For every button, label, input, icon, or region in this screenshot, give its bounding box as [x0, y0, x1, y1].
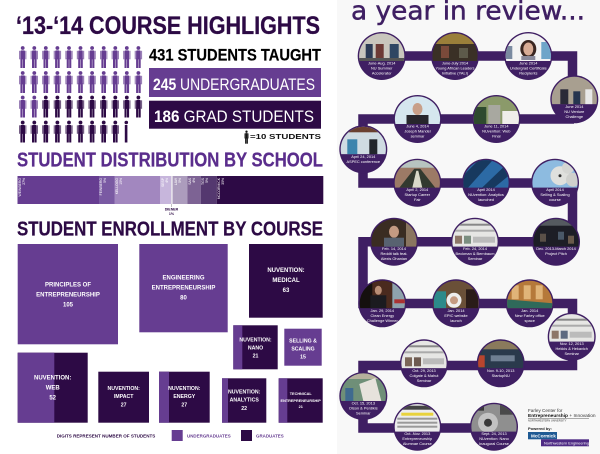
- event: clean energy winner: Clean Energy: [371, 313, 394, 318]
- event: venture challenge: NU Venture: [564, 109, 584, 114]
- block: impact: [98, 372, 149, 423]
- stat: grad students: [149, 101, 321, 129]
- event: venture challenge: June 2014: [565, 104, 584, 109]
- event: EPIC website launch: Jan. 2014: [447, 308, 465, 313]
- event: Beckman and Bernbaum seminar: Seminar: [468, 256, 483, 261]
- event: new Farley office: [506, 279, 554, 329]
- event: clean energy winner: Challenge Winner: [367, 318, 398, 323]
- callout: diener: DIENER: [165, 208, 179, 212]
- stacked bar chart: WEINBERG: [18, 178, 22, 196]
- event: ASPEC conference: [339, 125, 387, 175]
- stacked bar chart: 4%: [165, 178, 169, 183]
- event: YALI: [431, 32, 479, 82]
- event: NUvention web final: [472, 95, 520, 145]
- event: Reddit talk: Alexis Ohanian: [381, 256, 407, 261]
- event: new Farley office: space: [525, 318, 535, 323]
- block: web: NUVENTION:: [34, 376, 71, 382]
- event: entrepreneurship alumnae course: Oct.-Nov. 2013: [404, 431, 430, 436]
- block: energy: NUVENTION:: [168, 386, 201, 392]
- event: entrepreneurship alumnae course: Alumnae Course: [403, 441, 432, 446]
- block: selling and scaling: [284, 329, 322, 366]
- event: NUvention web final: June 11, 2014: [484, 124, 509, 128]
- event: EPIC website launch: EPIC website: [444, 313, 468, 318]
- event: StartupNU: [477, 339, 525, 389]
- callout: diener: 1%: [169, 212, 175, 216]
- block: engineering: ENGINEERING: [162, 276, 205, 282]
- pictogram key: [244, 131, 321, 144]
- event: Joseph Mandel seminar: [394, 95, 442, 145]
- block: impact: 27: [121, 402, 127, 408]
- event: project pitch: Dec. 2013-March 2014: [536, 246, 577, 251]
- stacked bar chart: LAW: [174, 177, 178, 185]
- panel: year in review: [337, 0, 600, 454]
- event: StartupNU: Nov. 9-10, 2013: [487, 368, 514, 373]
- logo: Northwestern Engineering: Northwestern Engineering: [544, 440, 589, 446]
- event: summer accelerator: NU Summer: [371, 66, 393, 70]
- logo: Farley Center: NORTHWESTERN UNIVERSITY: [528, 418, 567, 422]
- logo: Farley Center: [528, 408, 596, 422]
- callout: diener: [165, 204, 179, 216]
- block: impact: NUVENTION:: [108, 386, 140, 392]
- event: EPIC website launch: [432, 279, 480, 329]
- block: nano: [233, 325, 278, 369]
- panel: course highlights: [16, 12, 322, 144]
- block: medical: NUVENTION:: [267, 268, 305, 274]
- stacked bar chart: SAS: [188, 177, 192, 185]
- timeline path: [363, 56, 574, 428]
- event: Colgate and Mahut seminar: [400, 339, 448, 389]
- event: selling and scaling course: April 2014: [546, 187, 565, 192]
- event: YALI: Initiative (YALI): [442, 70, 469, 76]
- event: YALI: Young African Leaders: [435, 66, 475, 70]
- stacked bar chart: 35%: [221, 178, 225, 185]
- event: undergrad certificate: Undergrad Certificate: [510, 66, 547, 70]
- event: startup career fair: [393, 159, 441, 209]
- event: entrepreneurship alumnae course: Entrepreneurship: [402, 436, 432, 441]
- heading: STUDENT ENROLLMENT BY COURSE: [17, 219, 323, 241]
- pictogram: students: [19, 46, 142, 142]
- event: Hekkis and Hekavich seminar: Nov. 12, 2013: [560, 341, 584, 346]
- block: analytics: ANALYTICS: [230, 398, 259, 404]
- block: nano: NANO: [248, 346, 263, 352]
- event: undergrad certificate: June 2014: [519, 60, 538, 66]
- event: Reddit talk: [370, 218, 418, 268]
- event: NUvention web final: NUvention: Web: [482, 128, 510, 134]
- logo: McCormick: [528, 432, 557, 439]
- event: Joseph Mandel seminar: Joseph Mandel: [404, 128, 431, 134]
- event: Reddit talk: Reddit talk feat.: [380, 251, 408, 256]
- stacked bar chart: MCCORMICK: [217, 177, 221, 199]
- event: startup career fair: Fair: [414, 197, 421, 202]
- block: web: 52: [49, 396, 57, 402]
- powered by label: Powered by:: [528, 426, 552, 431]
- event: Joseph Mandel seminar: June 4, 2014: [406, 124, 430, 128]
- event: Beckman and Bernbaum seminar: Feb. 24, 2014: [463, 246, 488, 251]
- event: NUvention analytics launched: launched: [478, 197, 494, 202]
- block: energy: [159, 372, 210, 423]
- event: Beckman and Bernbaum seminar: [451, 218, 499, 268]
- stacked bar chart: 15%: [119, 178, 123, 185]
- block: technical: TECHNICAL: [290, 392, 312, 396]
- event: ASPEC conference: April 24, 2014: [351, 154, 376, 159]
- block: medical: [249, 244, 323, 318]
- event: undergrad certificate: [504, 32, 552, 82]
- block: technical: ENTREPRENEURSHIP: [281, 399, 321, 403]
- stacked bar chart: 27%: [22, 178, 26, 185]
- event: summer accelerator: [358, 32, 406, 82]
- event: Hekkis and Hekavich seminar: Seminar: [564, 351, 580, 356]
- block: principles: ENTREPRENEURSHIP: [36, 292, 100, 298]
- event: venture challenge: Challenge: [566, 114, 583, 119]
- event: clean energy winner: [358, 279, 406, 329]
- event: NUvention nano: [470, 403, 518, 453]
- block: analytics: NUVENTION:: [228, 390, 261, 396]
- event: project pitch: Project Pitch: [545, 251, 567, 256]
- event: new Farley office: Jan. 2014: [521, 308, 539, 313]
- logo: Farley Center: Farley Center for: [528, 408, 563, 413]
- event: Olson and Perdikis seminar: Olson & Perdikis: [349, 406, 378, 410]
- panel: student enrollment: [17, 219, 323, 441]
- stat: undergraduates: [149, 68, 321, 97]
- event: Joseph Mandel seminar: seminar: [411, 134, 425, 138]
- stat: total students: 431 STUDENTS TAUGHT: [149, 46, 322, 64]
- block: energy: ENERGY: [173, 394, 196, 400]
- heading: STUDENT DISTRIBUTION BY SCHOOL: [17, 150, 323, 172]
- logo: Farley Center: Entrepreneurship + Innovation: [528, 413, 596, 419]
- event: NUvention nano: NUvention: Nano: [479, 436, 509, 441]
- event: Hekkis and Hekavich seminar: Hekkis & Hekavich: [555, 346, 588, 351]
- block: engineering: [139, 244, 228, 332]
- block: engineering: 80: [180, 296, 187, 302]
- event: startup career fair: Startup Career: [405, 192, 431, 197]
- stacked bar chart: [18, 176, 323, 204]
- stacked bar chart: 5%: [205, 178, 209, 183]
- event: NUvention nano: Sept. 24, 2013: [481, 431, 507, 436]
- block: technical: 21: [299, 405, 303, 409]
- event: StartupNU: StartupNU: [492, 373, 510, 378]
- event: Beckman and Bernbaum seminar: Beckman & Bernbaum: [456, 251, 494, 256]
- block: principles: [18, 244, 118, 344]
- block: medical: 63: [283, 288, 290, 294]
- event: NUvention web final: Final: [492, 134, 501, 138]
- block: principles: PRINCIPLES OF: [45, 282, 91, 288]
- legend: GRADUATES: [256, 434, 284, 438]
- stacked bar chart: 5%: [178, 178, 182, 183]
- event: Colgate and Mahut seminar: Seminar: [417, 378, 432, 383]
- event: summer accelerator: June-Aug. 2014: [368, 60, 396, 66]
- event: NUvention analytics launched: April 2014: [477, 187, 496, 192]
- block: technical: [279, 378, 323, 423]
- stacked bar chart: TGS: [201, 177, 205, 185]
- block: analytics: 22: [241, 406, 247, 412]
- event: ASPEC conference: ASPEC conference: [347, 159, 380, 164]
- stacked bar chart: FEINBERG: [99, 178, 103, 195]
- event: Olson and Perdikis seminar: [339, 372, 387, 422]
- block: selling and scaling: SELLING &: [289, 338, 317, 344]
- block: medical: MEDICAL: [272, 278, 300, 284]
- event: undergrad certificate: Recipients: [519, 70, 537, 76]
- block: engineering: ENTREPRENEURSHIP: [152, 286, 215, 292]
- event: project pitch: [532, 218, 580, 268]
- block: principles: 105: [63, 302, 74, 308]
- event: entrepreneurship alumnae course: [393, 403, 441, 453]
- event: NUvention nano: Inaugural Course: [479, 441, 509, 446]
- logo: McCormick: McCormick: [531, 434, 556, 438]
- legend: [57, 430, 284, 441]
- event: Olson and Perdikis seminar: Oct. 15, 2013: [352, 400, 375, 406]
- event: Colgate and Mahut seminar: Colgate & Mahut: [410, 373, 439, 378]
- legend: UNDERGRADUATES: [187, 434, 231, 438]
- stacked bar chart: 5%: [103, 178, 107, 183]
- panel: student distribution: [17, 150, 323, 216]
- event: Hekkis and Hekavich seminar: [548, 313, 596, 363]
- event: Olson and Perdikis seminar: Seminar: [356, 410, 371, 416]
- event: selling and scaling course: [531, 159, 580, 209]
- event: selling and scaling course: course: [549, 197, 561, 202]
- title: ‘13-‘14 COURSE HIGHLIGHTS: [16, 12, 320, 40]
- block: nano: NUVENTION:: [239, 338, 272, 344]
- event: NUvention analytics launched: [462, 159, 510, 209]
- block: web: WEB: [46, 386, 60, 392]
- event: new Farley office: New Farley office: [515, 313, 545, 318]
- event: Colgate and Mahut seminar: Oct. 29, 2013: [412, 368, 436, 373]
- event: summer accelerator: Accelerator: [372, 70, 392, 76]
- event: Reddit talk: Feb. 14, 2014: [382, 246, 407, 251]
- block: analytics: [222, 378, 266, 423]
- event: YALI: June-July 2014: [442, 60, 469, 66]
- block: selling and scaling: SCALING: [291, 346, 315, 352]
- event: clean energy winner: Jan. 29, 2014: [371, 308, 395, 313]
- event: NUvention analytics launched: NUvention: Analytics: [468, 192, 504, 197]
- event: selling and scaling course: Selling & Scaling: [540, 192, 570, 197]
- legend: DIGITS REPRESENT NUMBER OF STUDENTS: [57, 434, 155, 438]
- block: selling and scaling: 15: [300, 354, 306, 360]
- logo: Northwestern Engineering: [541, 439, 589, 446]
- stacked bar chart: 4%: [192, 178, 196, 183]
- block: impact: IMPACT: [114, 394, 134, 400]
- block: nano: 21: [253, 354, 258, 360]
- event: startup career fair: April 2, 2014: [406, 187, 429, 192]
- event: EPIC website launch: launch: [450, 318, 462, 323]
- event: venture challenge: [550, 75, 598, 125]
- stacked bar chart: SESP: [161, 177, 165, 187]
- stat: grad students: 186 GRAD STUDENTS: [154, 108, 314, 126]
- pictogram key: =10 STUDENTS: [250, 132, 321, 141]
- block: energy: 27: [181, 402, 187, 408]
- stat: undergraduates: 245 UNDERGRADUATES: [153, 76, 315, 94]
- stacked bar chart: KELLOGG: [115, 178, 119, 194]
- block: web: [18, 353, 88, 423]
